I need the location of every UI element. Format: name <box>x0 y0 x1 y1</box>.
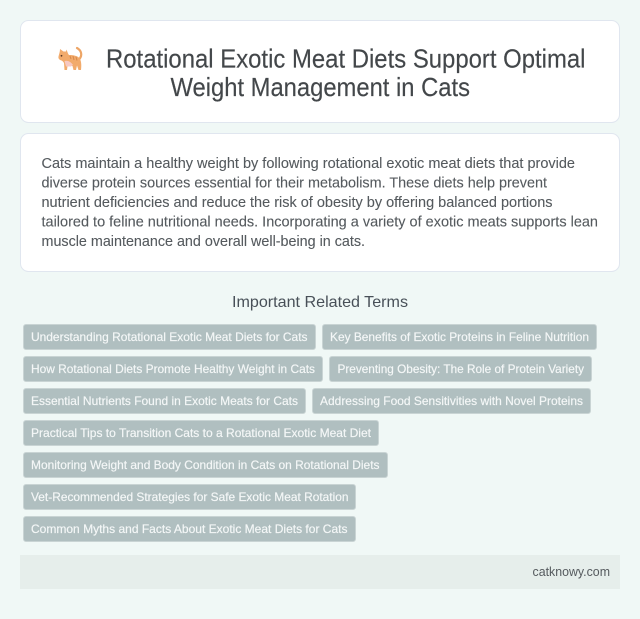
footer <box>20 555 620 589</box>
title: Weight Management in Cats <box>170 74 470 102</box>
title: Rotational Exotic Meat Diets Support Optimal <box>106 46 586 74</box>
tag <box>24 324 316 350</box>
tag <box>24 388 306 414</box>
tag: Practical Tips to Transition Cats to a Rotational Exotic Meat Diet <box>31 426 372 440</box>
tag <box>24 452 388 478</box>
text block: description: muscle maintenance and overall well-being in cats. <box>42 234 365 250</box>
tag <box>24 484 356 510</box>
tag <box>312 388 590 414</box>
tag: How Rotational Diets Promote Healthy Weight in Cats <box>31 362 315 376</box>
tag <box>24 420 378 446</box>
text block: description: diverse protein sources essential for their metabolism. These diets help prevent <box>42 176 547 192</box>
tag <box>322 324 596 350</box>
text block: description: nutrient deficiencies and reduce the risk of obesity by offering balanced portions <box>42 195 552 211</box>
tag: Vet-Recommended Strategies for Safe Exotic Meat Rotation <box>31 490 348 504</box>
tag: Key Benefits of Exotic Proteins in Feline Nutrition <box>330 330 589 344</box>
text block: description: tailored to feline nutritional needs. Incorporating a variety of exotic meats supports lean <box>42 214 598 230</box>
text block: description <box>42 156 598 250</box>
panel: title card <box>20 20 620 122</box>
footer text: catknowy.com <box>532 564 610 579</box>
tag list <box>24 324 596 542</box>
panel: description <box>20 134 620 272</box>
tag: Understanding Rotational Exotic Meat Diets for Cats <box>31 330 308 344</box>
tag: Essential Nutrients Found in Exotic Meats for Cats <box>31 394 298 408</box>
text block: description: Cats maintain a healthy weight by following rotational exotic meat diets that provide <box>42 156 575 172</box>
tag <box>24 516 356 542</box>
tag: Monitoring Weight and Body Condition in Cats on Rotational Diets <box>31 458 380 472</box>
tag: Preventing Obesity: The Role of Protein Variety <box>338 362 584 376</box>
icon: cat <box>58 48 81 70</box>
tag <box>24 356 322 382</box>
tag: Addressing Food Sensitivities with Novel Proteins <box>320 394 583 408</box>
tag: Common Myths and Facts About Exotic Meat Diets for Cats <box>31 522 348 536</box>
tag <box>330 356 592 382</box>
title <box>106 46 586 102</box>
heading: related terms: Important Related Terms <box>232 294 408 311</box>
